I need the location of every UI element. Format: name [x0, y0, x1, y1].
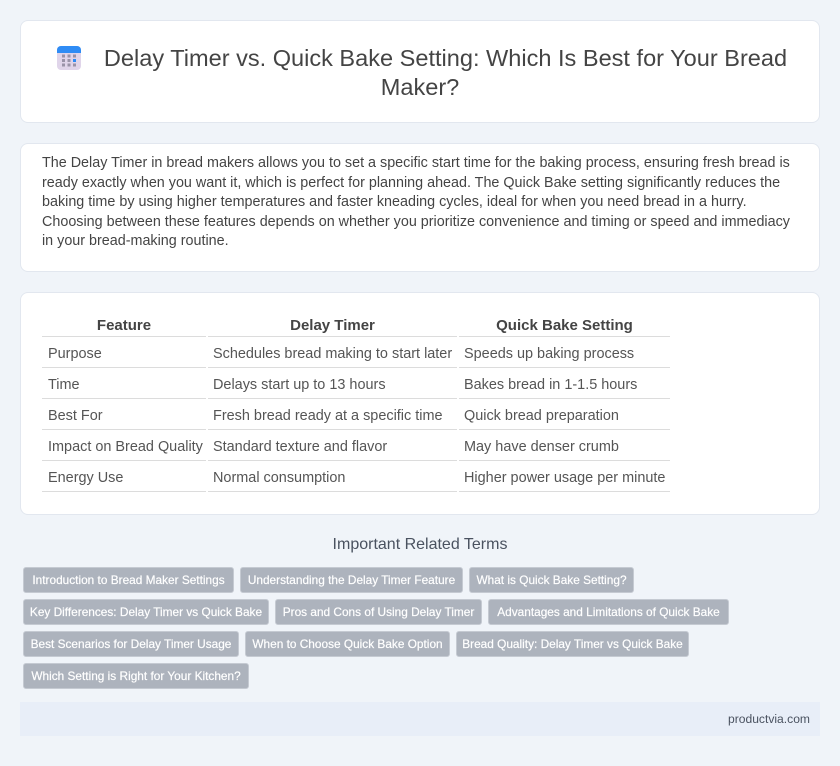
table: Best For — [48, 408, 103, 424]
tags: related terms: What is Quick Bake Setting? — [476, 573, 627, 587]
table: Feature — [97, 317, 151, 334]
tags: related terms: Key Differences: Delay Timer vs Quick Bake — [30, 605, 262, 619]
table: Quick bread preparation — [464, 408, 619, 424]
table: Delay Timer — [290, 317, 375, 334]
table: Normal consumption — [213, 470, 345, 486]
panel: header — [20, 20, 820, 123]
tags: related terms: Bread Quality: Delay Timer vs Quick Bake — [462, 637, 683, 651]
panel: description — [20, 143, 820, 272]
text: description: baking time by using higher temperatures and faster kneading cycles, ideal for when you need bread in a hurry. — [42, 194, 747, 210]
table — [42, 317, 670, 492]
text: description: The Delay Timer in bread makers allows you to set a specific start time for the baking process, ensuring fresh bread is — [42, 155, 790, 171]
tags: related terms: When to Choose Quick Bake Option — [252, 637, 443, 651]
tags: related terms: Pros and Cons of Using Delay Timer — [283, 605, 474, 619]
text: description: Choosing between these features depends on whether you prioritize convenience and timing or speed and immediacy — [42, 214, 790, 230]
title: Maker? — [381, 74, 459, 100]
text: description — [42, 155, 790, 249]
tags: related terms: Understanding the Delay Timer Feature — [248, 573, 455, 587]
table: Energy Use — [48, 470, 123, 486]
tags: related terms: Introduction to Bread Maker Settings — [32, 573, 225, 587]
footer — [20, 702, 820, 736]
panel: comparison table — [20, 292, 820, 515]
table: Delays start up to 13 hours — [213, 377, 386, 393]
table: Bakes bread in 1-1.5 hours — [464, 377, 637, 393]
table: Impact on Bread Quality — [48, 439, 203, 455]
table: Higher power usage per minute — [464, 470, 665, 486]
table: Quick Bake Setting — [496, 317, 633, 334]
icon: calendar — [57, 46, 81, 70]
table: Time — [48, 377, 80, 393]
tags: related terms: Which Setting is Right for Your Kitchen? — [31, 669, 241, 683]
title — [104, 45, 787, 100]
tags: related terms: Advantages and Limitations of Quick Bake — [497, 605, 720, 619]
table: Speeds up baking process — [464, 346, 634, 362]
table: Purpose — [48, 346, 102, 362]
text: description: in your bread-making routine. — [42, 233, 229, 249]
table: Schedules bread making to start later — [213, 346, 452, 362]
table: May have denser crumb — [464, 439, 619, 455]
text: description: ready exactly when you want it, which is perfect for planning ahead. The Quick Bake setting significantly reduces the — [42, 175, 780, 191]
tags: related terms — [23, 567, 729, 689]
title: Delay Timer vs. Quick Bake Setting: Which Is Best for Your Bread — [104, 45, 787, 71]
table: Fresh bread ready at a specific time — [213, 408, 442, 424]
table: Standard texture and flavor — [213, 439, 387, 455]
tags: related terms: Best Scenarios for Delay Timer Usage — [31, 637, 231, 651]
heading: related terms: Important Related Terms — [333, 536, 507, 553]
text: source: productvia.com — [728, 712, 810, 726]
